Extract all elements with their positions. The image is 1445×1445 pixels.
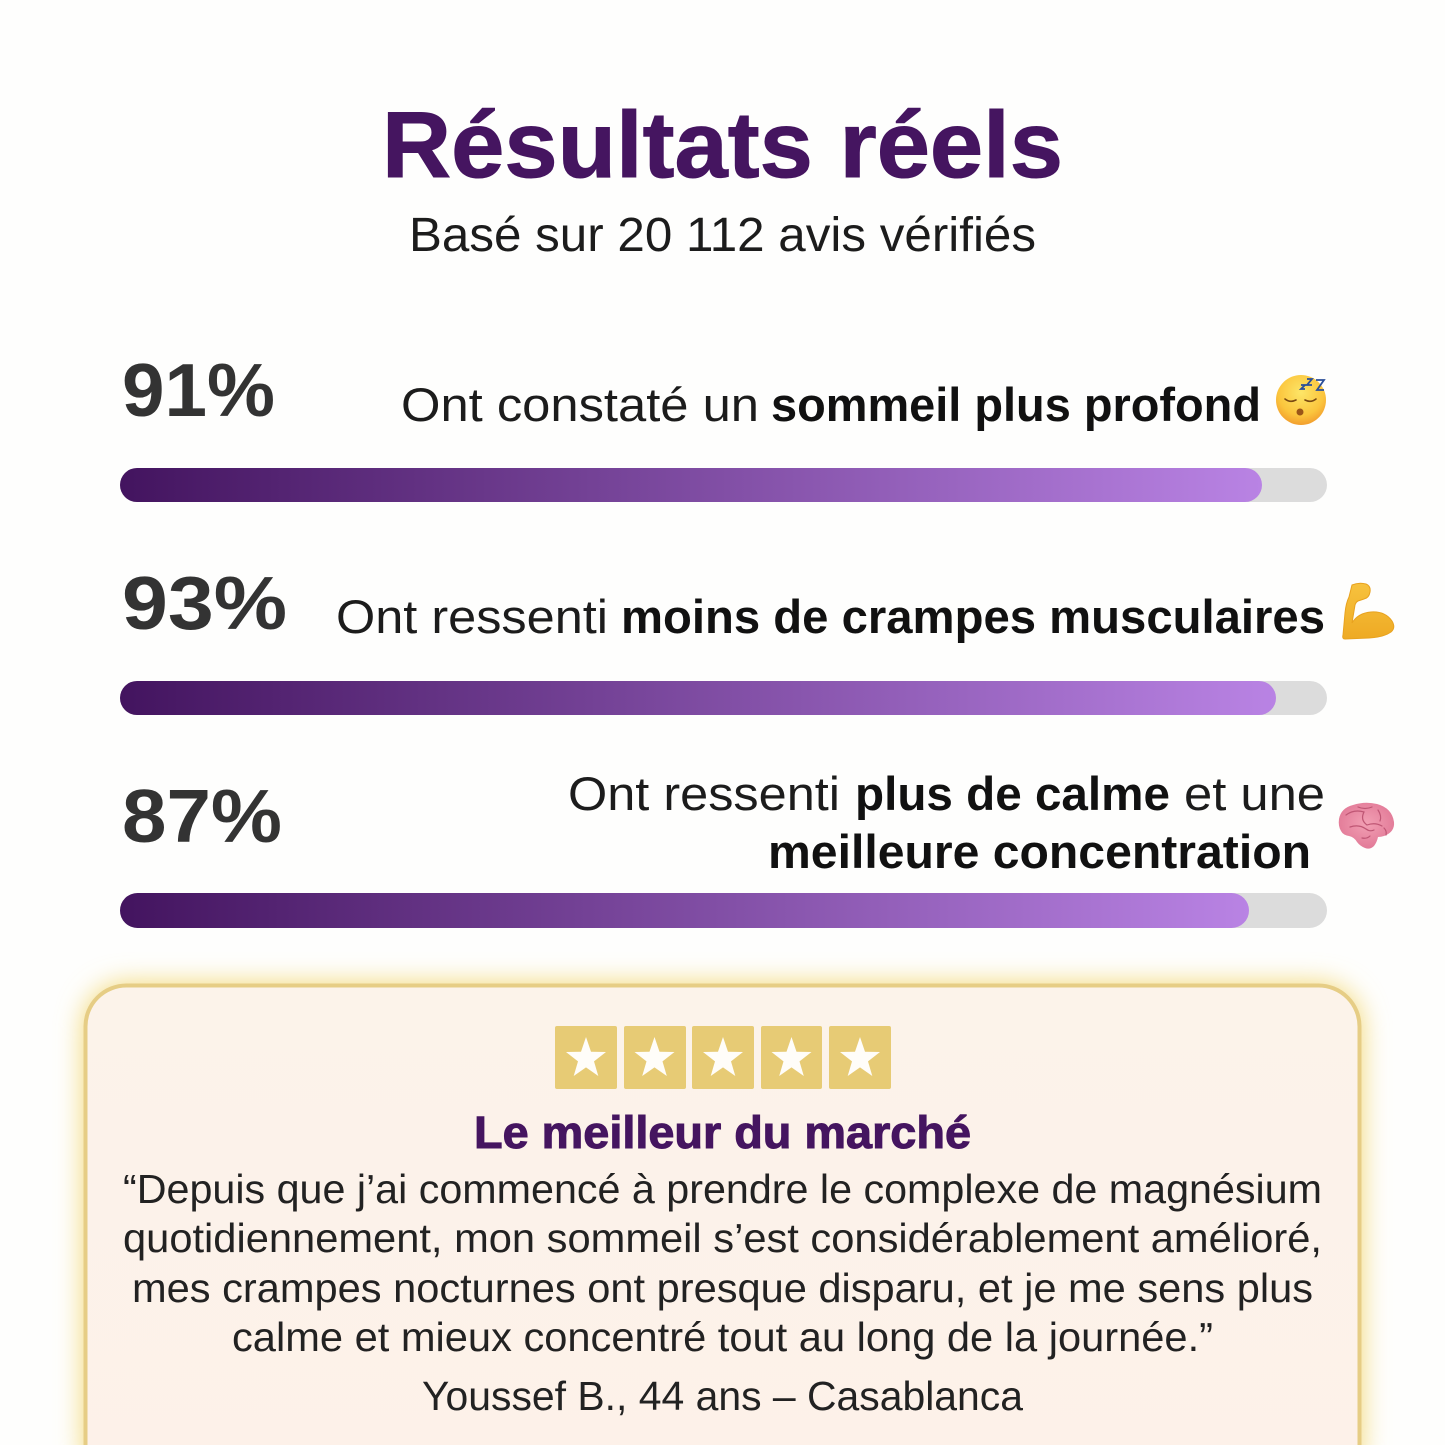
label: deeper sleep: sommeil plus profond	[771, 378, 1261, 431]
label: calm and concentration: et une	[1184, 767, 1325, 820]
icon: brain	[1339, 803, 1394, 849]
icon: sleeping face	[1276, 375, 1326, 425]
label: calm and concentration: Ont ressenti	[568, 767, 840, 820]
testimonial author: Youssef B., 44 ans – Casablanca	[422, 1373, 1023, 1419]
label: deeper sleep: Ont constaté un	[401, 378, 759, 431]
stat row: calm 87%	[120, 767, 1394, 928]
label: fewer cramps: moins de crampes musculaires	[621, 590, 1325, 643]
icon: flexed biceps	[1343, 583, 1394, 639]
progress bar 87%	[120, 893, 1327, 928]
testimonial heading: Le meilleur du marché	[474, 1107, 971, 1158]
testimonial quote	[123, 1166, 1322, 1360]
progress bar 93%	[120, 681, 1327, 715]
percentage 91%: 91%	[122, 348, 275, 432]
label: fewer cramps: Ont ressenti	[336, 590, 608, 643]
label: calm and concentration: plus de calme	[855, 767, 1170, 820]
label: deeper sleep	[401, 378, 1261, 431]
progress bar 91%	[120, 468, 1327, 502]
panel: testimonial	[83, 983, 1362, 1445]
stat row: sleep 91%	[120, 348, 1327, 502]
stat row: cramps 93%	[120, 561, 1394, 715]
subtitle: Basé sur 20 112 avis vérifiés	[409, 209, 1036, 262]
five star rating	[555, 1026, 891, 1089]
testimonial quote: “Depuis que j’ai commencé à prendre le complexe de magnésium	[123, 1166, 1322, 1212]
title: Résultats réels	[382, 92, 1063, 197]
label: calm and concentration	[568, 767, 1325, 878]
testimonial quote: mes crampes nocturnes ont presque disparu, et je me sens plus	[132, 1265, 1313, 1311]
percentage 93%: 93%	[122, 561, 287, 645]
testimonial quote: quotidiennement, mon sommeil s’est considérablement amélioré,	[123, 1215, 1322, 1261]
percentage 87%: 87%	[122, 774, 282, 858]
testimonial quote: calme et mieux concentré tout au long de la journée.”	[232, 1314, 1213, 1360]
label: calm and concentration: meilleure concentration	[768, 825, 1311, 878]
